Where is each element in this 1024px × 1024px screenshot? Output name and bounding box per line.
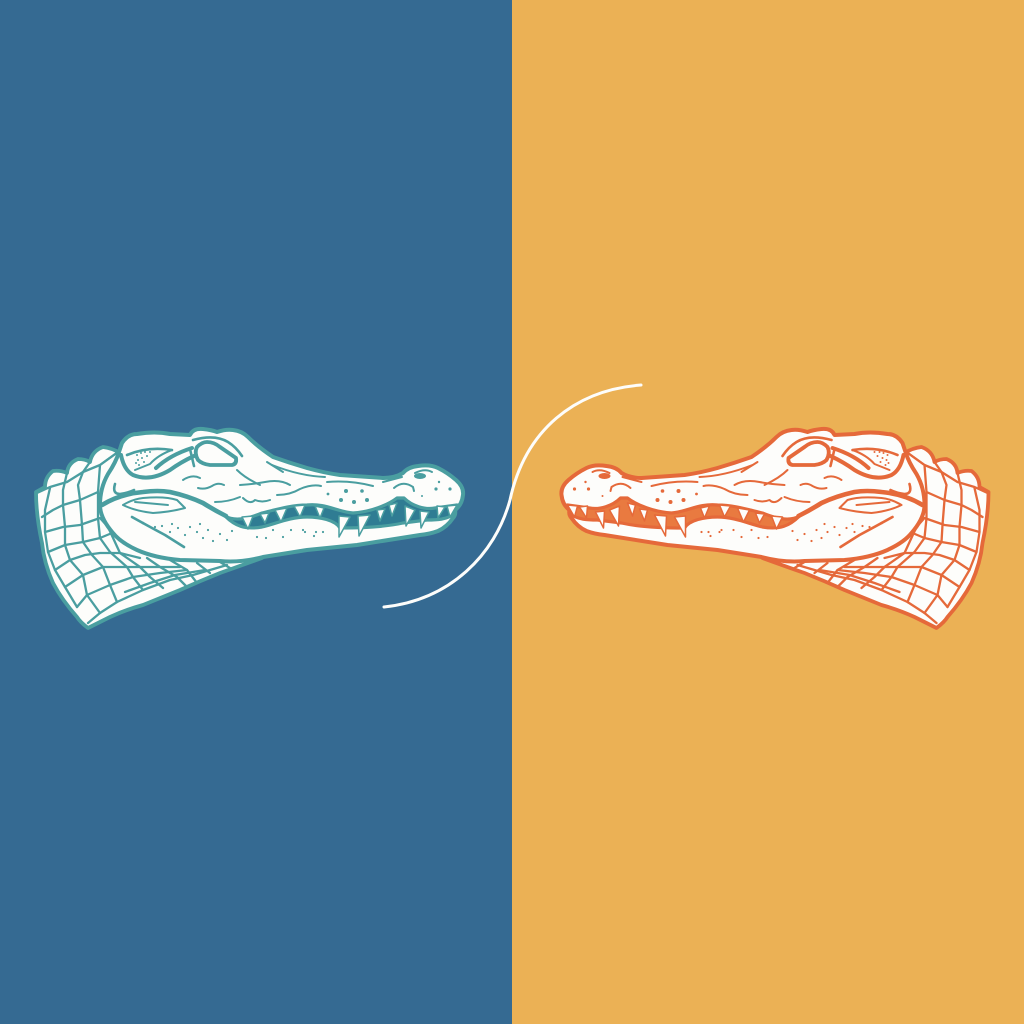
skin wrinkles <box>114 462 432 502</box>
white S-curve connector across the divide <box>384 385 641 607</box>
neck scales mirrored <box>762 447 988 628</box>
eye and socket mirrored <box>782 437 904 478</box>
neck scales <box>36 447 262 628</box>
panel: blue left background <box>0 0 512 1024</box>
teeth mirrored <box>568 503 782 537</box>
teeth <box>242 503 457 537</box>
nostril and skin dots <box>142 473 452 542</box>
jaw line mirrored <box>798 491 922 547</box>
head silhouette mirrored <box>561 429 924 562</box>
nostril and skin dots mirrored <box>573 473 883 542</box>
open mouth mirrored <box>568 498 800 528</box>
panel: amber right background <box>512 0 1024 1024</box>
illustration: orange-outlined crocodile head facing left <box>561 429 988 628</box>
illustration: teal-outlined crocodile head facing right <box>36 429 463 628</box>
head silhouette <box>100 429 463 562</box>
jaw line <box>102 491 226 547</box>
open mouth <box>225 498 457 528</box>
skin wrinkles mirrored <box>592 462 910 502</box>
eye and socket <box>121 437 242 478</box>
